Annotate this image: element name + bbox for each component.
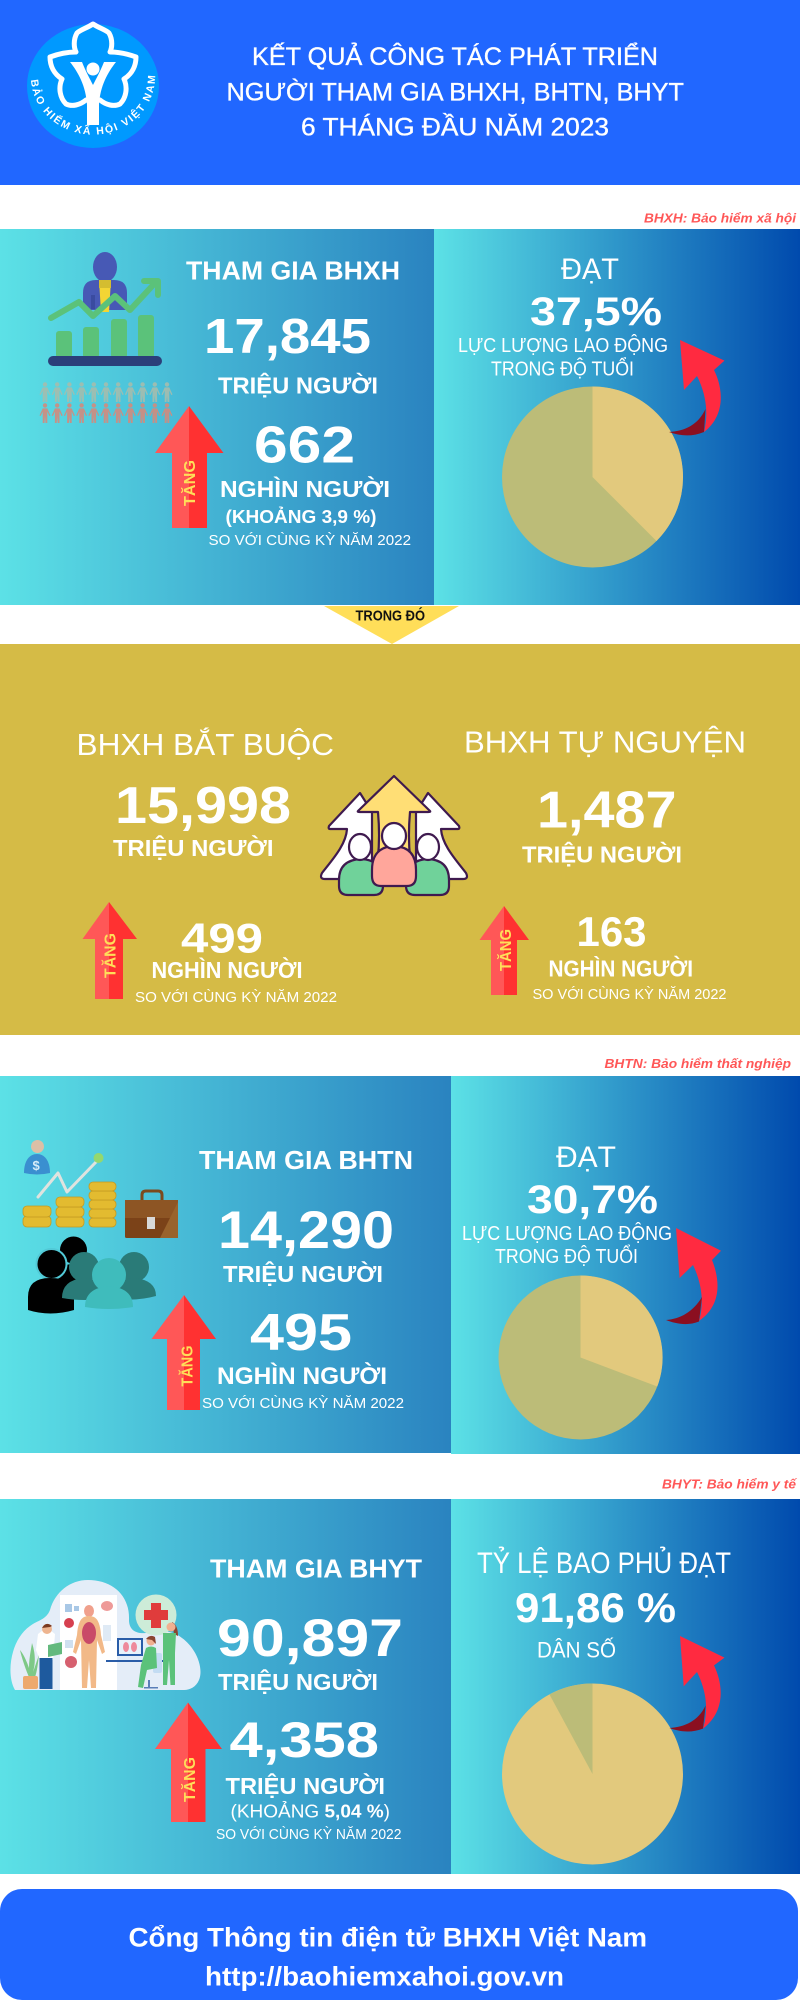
- heading: THAM GIA BHXH: [186, 256, 400, 286]
- increase unit: TRIỆU NGƯỜI: [226, 1772, 385, 1799]
- icon: medical illustration: [10, 1580, 200, 1690]
- footer: website: http://baohiemxahoi.gov.vn: [205, 1962, 564, 1992]
- legend note: BHTN: BHTN: Bảo hiểm thất nghiệp: [604, 1056, 791, 1071]
- footer: [0, 1889, 798, 2000]
- arrow: increase voluntary: [480, 906, 529, 995]
- voluntary increase unit: NGHÌN NGƯỜI: [548, 954, 693, 982]
- arrow: curved red: [666, 1228, 721, 1324]
- description: TRONG ĐỘ TUỔI: [491, 356, 634, 380]
- title: 6 THÁNG ĐẦU NĂM 2023: [301, 112, 609, 142]
- description: DÂN SỐ: [537, 1636, 616, 1662]
- increase value: 495: [250, 1304, 352, 1362]
- panel: tham gia BHXH: [0, 229, 434, 605]
- heading: BHXH tự nguyện: BHXH TỰ NGUYỆN: [464, 724, 746, 760]
- icon: rows of people: [40, 382, 172, 423]
- percent value: 37,5%: [530, 290, 662, 334]
- panel: breakdown compulsory vs voluntary: [0, 644, 800, 1035]
- arrow: curved red: [669, 340, 724, 435]
- arrow: increase: [152, 1295, 216, 1410]
- arrow: increase: [155, 1702, 222, 1822]
- icon: group of people: [28, 1236, 156, 1314]
- icon: money growth and briefcase: $: [32, 1158, 40, 1173]
- logo: Bảo hiểm xã hội Việt Nam: BẢO HIỂM XÃ HỘI VIỆT NAM: [31, 76, 156, 135]
- icon: people with arrows: [321, 776, 467, 895]
- total participants: 17,845: [204, 310, 371, 364]
- label: đạt: ĐẠT: [556, 1141, 616, 1174]
- arrow: increase: TĂNG: [180, 460, 199, 506]
- unit: TRIỆU NGƯỜI: [218, 1668, 378, 1695]
- legend note: BHXH: BHXH: Bảo hiểm xã hội: [644, 210, 796, 226]
- increase value: 4,358: [230, 1712, 379, 1768]
- percent increase: (KHOẢNG 5,04 %): [230, 1800, 390, 1822]
- panel: BHTN share of labour force: [451, 1076, 800, 1454]
- legend note: BHYT: BHYT: Bảo hiểm y tế: [662, 1476, 798, 1492]
- icon: businessman with growth chart: [48, 252, 162, 366]
- pie chart 37.5%: [502, 386, 683, 568]
- percent value: 91,86 %: [515, 1584, 676, 1631]
- comparison note: SO VỚI CÙNG KỲ NĂM 2022: [216, 1826, 402, 1843]
- title: [226, 41, 684, 142]
- title: KẾT QUẢ CÔNG TÁC PHÁT TRIỂN: [252, 41, 658, 71]
- voluntary unit: TRIỆU NGƯỜI: [522, 840, 682, 868]
- panel: BHYT coverage: [451, 1499, 800, 1874]
- arrow: increase compulsory: [82, 902, 137, 999]
- arrow: increase: TĂNG: [180, 1757, 199, 1802]
- icon: money growth and briefcase: [23, 1140, 178, 1238]
- panel: tham gia BHTN: [0, 1076, 451, 1453]
- compulsory unit: TRIỆU NGƯỜI: [113, 834, 274, 861]
- callout: trong đó: TRONG ĐÓ: [356, 606, 425, 624]
- compulsory increase value: 499: [181, 914, 263, 962]
- increase unit: NGHÌN NGƯỜI: [217, 1362, 387, 1390]
- total participants: 14,290: [218, 1201, 394, 1260]
- panel: BHXH share of labour force: [434, 229, 800, 605]
- header band: [0, 0, 800, 185]
- callout: trong đó: [324, 606, 459, 644]
- title: NGƯỜI THAM GIA BHXH, BHTN, BHYT: [226, 78, 684, 106]
- compulsory comparison note: SO VỚI CÙNG KỲ NĂM 2022: [135, 989, 337, 1006]
- pie chart 91.86%: [502, 1684, 683, 1864]
- heading: THAM GIA BHTN: [199, 1145, 413, 1175]
- unit: TRIỆU NGƯỜI: [218, 372, 378, 398]
- heading: THAM GIA BHYT: [210, 1554, 422, 1584]
- arrow: increase voluntary: TĂNG: [496, 929, 515, 971]
- compulsory value: 15,998: [115, 777, 291, 835]
- increase unit: NGHÌN NGƯỜI: [220, 475, 390, 502]
- voluntary increase value: 163: [576, 908, 646, 955]
- arrow: curved red: [669, 1636, 724, 1731]
- description: LỰC LƯỢNG LAO ĐỘNG: [458, 334, 668, 357]
- panel: tham gia BHYT: [0, 1499, 451, 1874]
- unit: TRIỆU NGƯỜI: [223, 1260, 383, 1287]
- description: TRONG ĐỘ TUỔI: [495, 1244, 638, 1268]
- voluntary value: 1,487: [537, 782, 676, 840]
- description: [458, 334, 668, 380]
- total participants: 90,897: [217, 1609, 403, 1668]
- label: coverage rate: TỶ LỆ BAO PHỦ ĐẠT: [477, 1546, 731, 1580]
- description: LỰC LƯỢNG LAO ĐỘNG: [462, 1222, 672, 1245]
- comparison note: SO VỚI CÙNG KỲ NĂM 2022: [208, 532, 411, 549]
- logo: Bảo hiểm xã hội Việt Nam: [27, 22, 159, 148]
- increase value: 662: [254, 416, 355, 474]
- footer: portal name: Cổng Thông tin điện tử BHXH Việt Nam: [128, 1922, 647, 1952]
- heading: BHXH bắt buộc: BHXH BẮT BUỘC: [76, 726, 334, 762]
- arrow: increase compulsory: TĂNG: [100, 933, 120, 978]
- pie chart 30.7%: [498, 1275, 663, 1440]
- percent increase: (KHOẢNG 3,9 %): [226, 506, 377, 527]
- arrow: increase: TĂNG: [178, 1346, 196, 1386]
- compulsory increase unit: NGHÌN NGƯỜI: [152, 956, 302, 983]
- arrow: increase: [155, 406, 224, 528]
- voluntary comparison note: SO VỚI CÙNG KỲ NĂM 2022: [532, 986, 726, 1003]
- comparison note: SO VỚI CÙNG KỲ NĂM 2022: [202, 1395, 404, 1412]
- description: [462, 1222, 672, 1268]
- label: đạt: ĐẠT: [561, 253, 619, 286]
- percent value: 30,7%: [527, 1178, 658, 1222]
